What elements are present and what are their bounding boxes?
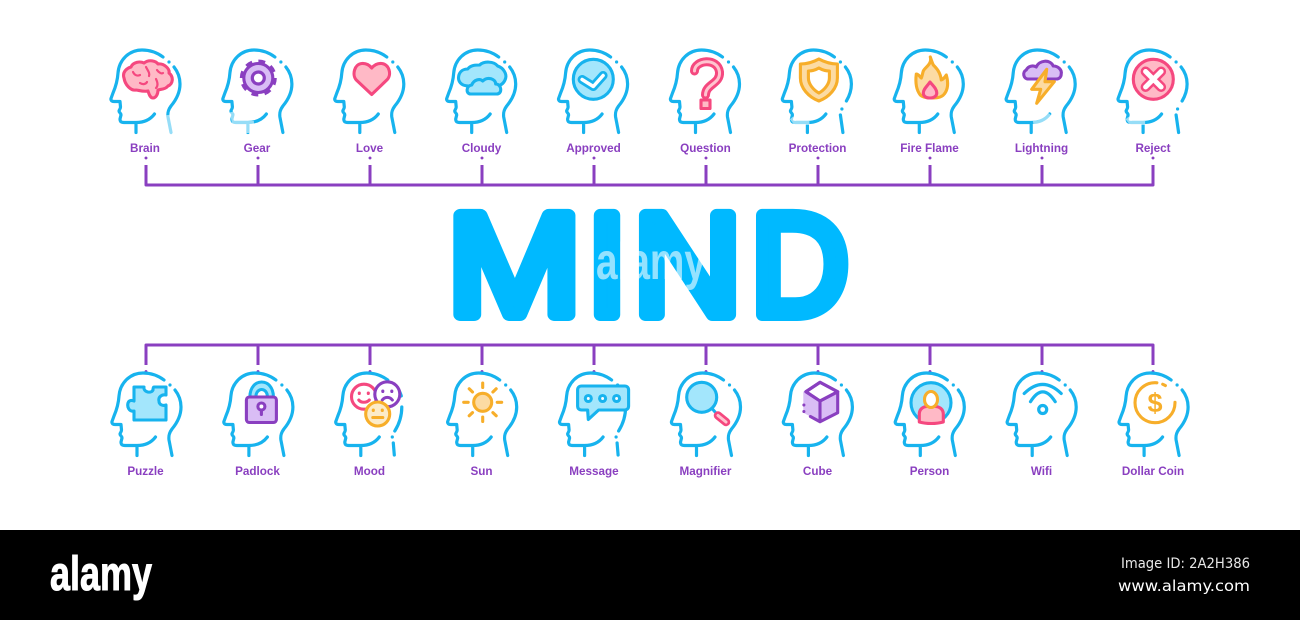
magnifier	[687, 382, 726, 422]
speech bubble	[578, 386, 629, 420]
padlock	[246, 382, 276, 422]
icon: wifi head	[1007, 373, 1076, 456]
icon: brain head	[111, 50, 180, 134]
person badge	[911, 383, 951, 424]
icon: cube head	[783, 373, 852, 456]
title: MIND: D	[751, 184, 849, 345]
title: MIND: N	[633, 185, 742, 346]
label: Reject: Reject	[1135, 142, 1171, 155]
icon: gear head	[223, 50, 292, 133]
label: Mood: Mood	[354, 465, 385, 478]
icon: fire flame head	[894, 50, 963, 132]
label: Message: Message	[569, 465, 619, 478]
label: Magnifier: Magnifier	[680, 465, 732, 478]
title: MIND: I	[587, 184, 627, 346]
puzzle piece	[128, 387, 166, 420]
title: MIND	[447, 184, 849, 346]
icon: sun head	[448, 373, 517, 456]
label: Puzzle: Puzzle	[127, 465, 164, 478]
sun	[464, 383, 502, 422]
label: Question: Question	[680, 142, 731, 155]
icon: message head	[560, 373, 629, 456]
cube	[803, 382, 838, 422]
title: MIND: M	[447, 185, 581, 346]
icon: mood head	[336, 373, 402, 456]
top connector tree	[145, 156, 1155, 185]
label: Cloudy: Cloudy	[462, 142, 502, 155]
gear	[242, 62, 274, 94]
icon: lightning head	[1006, 50, 1075, 132]
storm cloud and bolt	[1024, 61, 1061, 103]
coin: $	[1147, 388, 1163, 418]
bottom connector tree	[145, 345, 1155, 373]
icon: reject head	[1118, 50, 1187, 132]
label: Approved: Approved	[566, 142, 621, 155]
label: Lightning: Lightning	[1015, 142, 1068, 155]
question mark	[694, 62, 720, 108]
website: www.alamy.com	[1118, 577, 1250, 595]
icon: person head	[895, 373, 964, 456]
label: Padlock: Padlock	[235, 465, 280, 478]
image id: Image ID: 2A2H386	[1121, 556, 1250, 572]
label: Dollar Coin: Dollar Coin	[1122, 465, 1184, 478]
label: Cube: Cube	[803, 465, 833, 478]
brain	[124, 61, 172, 98]
label: Wifi: Wifi	[1031, 465, 1052, 478]
wifi symbol	[1024, 384, 1061, 414]
footer logo: alamy	[50, 548, 152, 601]
label: Sun: Sun	[470, 465, 493, 478]
check badge	[573, 59, 613, 99]
mood faces	[352, 382, 400, 426]
label: Protection: Protection	[789, 142, 846, 155]
flame	[916, 57, 948, 98]
watermark: alamy	[596, 233, 706, 291]
footer bar	[0, 530, 1300, 620]
shield	[800, 59, 837, 101]
icon: question head	[670, 50, 740, 132]
label: Gear: Gear	[244, 142, 271, 155]
label: Brain: Brain	[130, 142, 160, 155]
clouds	[459, 62, 506, 94]
icon: cloudy head	[447, 50, 516, 132]
label: Person: Person	[910, 465, 949, 478]
icon: approved head	[559, 50, 628, 132]
icon: magnifier head	[671, 373, 740, 456]
label: Love: Love	[356, 142, 384, 155]
reject badge	[1133, 59, 1173, 99]
label: Fire Flame: Fire Flame	[900, 142, 959, 155]
icon: puzzle head	[112, 373, 181, 456]
icon: padlock head	[224, 373, 293, 456]
icon: protection head	[782, 50, 851, 132]
icon: love head	[335, 50, 404, 132]
heart	[354, 63, 390, 94]
icon: dollar coin head	[1119, 373, 1188, 456]
